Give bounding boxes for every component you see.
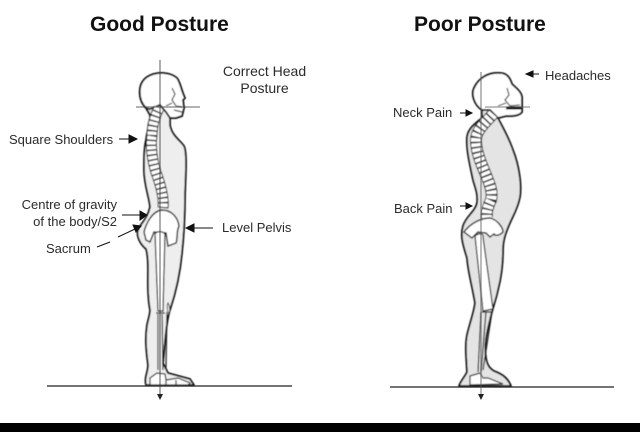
label: centre of gravity: Centre of gravity [22, 197, 117, 212]
title: poor posture: Poor Posture [414, 13, 546, 36]
skull [473, 73, 522, 118]
label: correct head posture: Correct Head [223, 63, 306, 79]
arrow: headaches [526, 71, 539, 77]
body outline [459, 73, 522, 386]
foot bones [150, 373, 190, 385]
shin bones [478, 312, 492, 372]
black footer bar [0, 423, 640, 432]
label: centre of gravity [22, 197, 117, 229]
label: back pain: Back Pain [394, 201, 453, 216]
shin bones [156, 312, 167, 370]
label: neck pain: Neck Pain [393, 105, 452, 120]
title: good posture: Good Posture [90, 13, 229, 36]
pelvis [464, 218, 503, 238]
label: headaches: Headaches [545, 68, 611, 83]
spine [151, 108, 163, 208]
label: sacrum: Sacrum [46, 241, 91, 256]
plumb line: poor posture [478, 72, 530, 400]
foot bones [470, 373, 503, 385]
body outline [137, 73, 194, 385]
pelvis [144, 210, 179, 246]
skull [140, 73, 185, 118]
arrow: back pain [460, 203, 472, 209]
arrow: centre of gravity [122, 211, 147, 220]
label: correct head posture [223, 63, 306, 96]
ground line: good posture [47, 385, 292, 387]
label: level pelvis: Level Pelvis [222, 220, 292, 235]
figure: poor posture skeleton [459, 73, 522, 386]
femur [475, 234, 493, 311]
arrow: level pelvis [186, 224, 213, 232]
spine [476, 114, 493, 218]
ground line: poor posture [390, 386, 614, 388]
figure: good posture skeleton [137, 73, 194, 385]
arrow: neck pain [460, 110, 472, 116]
arrow: square shoulders [119, 135, 137, 143]
label: correct head posture: Posture [240, 80, 289, 96]
label: square shoulders: Square Shoulders [9, 132, 114, 147]
arrow: sacrum [97, 225, 141, 247]
femur [155, 232, 165, 311]
plumb line: good posture [136, 60, 200, 400]
label: centre of gravity: of the body/S2 [33, 214, 117, 229]
